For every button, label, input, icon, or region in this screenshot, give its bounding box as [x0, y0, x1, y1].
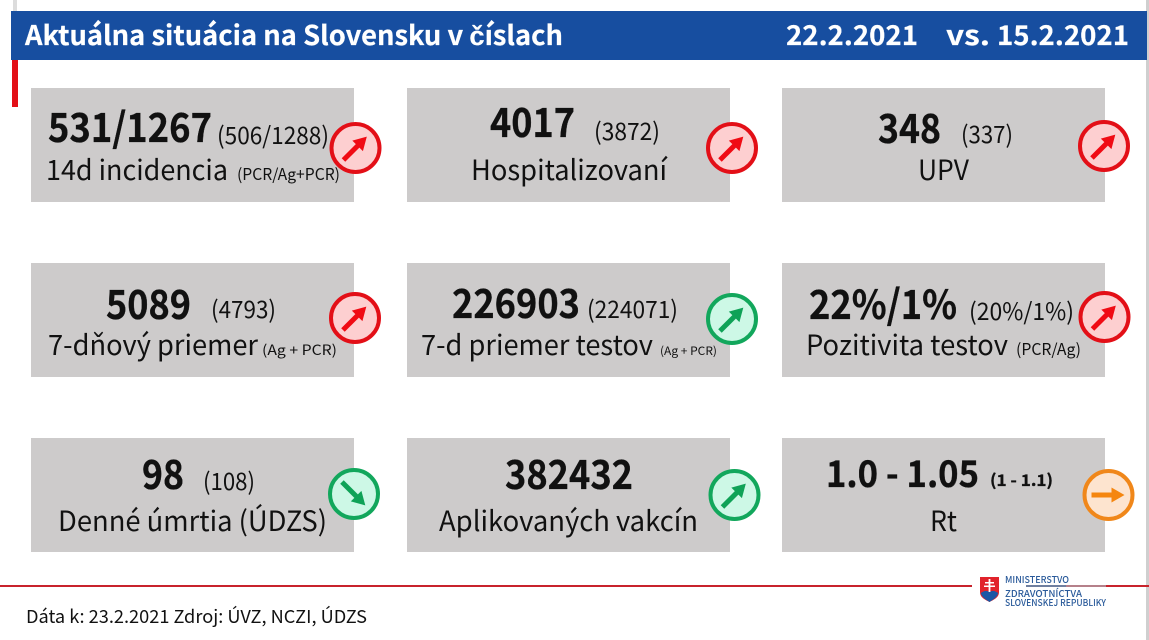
panel: Denné úmrtia [31, 438, 378, 552]
icon: red up arrow [331, 294, 379, 342]
label: 14d incidencia [46, 149, 228, 189]
vs label: vs. [946, 14, 990, 53]
value: 1.0 - 1.05 [826, 444, 979, 498]
icon: green up arrow [708, 295, 756, 343]
label: Hospitalizovaní [471, 149, 668, 189]
panel: 14d incidencia [31, 88, 380, 202]
previous value: (224071) [587, 290, 678, 325]
logo text line 2: ZDRAVOTNÍCTVA [1005, 586, 1082, 600]
value: 531/1267 [48, 96, 212, 154]
label note: (Ag + PCR) [660, 343, 717, 359]
value: 22%/1% [809, 273, 957, 331]
previous value: (1 - 1.1) [990, 467, 1053, 491]
panel: Rt [782, 438, 1132, 552]
current date: 22.2.2021 [786, 14, 918, 53]
label note: (PCR/Ag) [1016, 336, 1081, 360]
previous value: (3872) [594, 112, 660, 147]
value: 4017 [490, 91, 575, 149]
panel: Aplikovaných vakcín [407, 438, 758, 552]
value: 226903 [452, 272, 580, 330]
label note: (Ag + PCR) [262, 340, 337, 360]
label note: (PCR/Ag+PCR) [237, 161, 340, 185]
previous value: (108) [203, 462, 255, 497]
panel: 7-d priemer testov [407, 263, 756, 377]
logo text line 1: MINISTERSTVO [1005, 572, 1069, 586]
label: UPV [918, 149, 970, 189]
icon: red up arrow [1080, 293, 1128, 341]
value: 98 [142, 443, 184, 501]
label: Denné úmrtia (ÚDZS) [58, 500, 327, 540]
icon: green up arrow [710, 471, 758, 519]
panel: Pozitivita testov [782, 263, 1128, 377]
title: Aktuálna situácia na Slovensku v číslach [24, 14, 563, 53]
icon: red up arrow [332, 124, 380, 172]
value: 5089 [106, 273, 191, 331]
icon: red up arrow [1080, 122, 1128, 170]
value: 382432 [505, 443, 633, 501]
label: Aplikovaných vakcín [439, 500, 698, 540]
previous value: (506/1288) [217, 116, 329, 151]
panel: 7-dňový priemer [31, 263, 379, 377]
previous value: (337) [961, 115, 1013, 150]
previous value: (20%/1%) [969, 292, 1074, 327]
panel: UPV [782, 88, 1128, 202]
source note: Dáta k: 23.2.2021 Zdroj: ÚVZ, NCZI, ÚDZS [26, 603, 367, 629]
icon: orange right arrow [1084, 471, 1132, 519]
value: 348 [878, 97, 941, 155]
icon: green down arrow [330, 470, 378, 518]
ministry logo [980, 572, 1107, 609]
label: Rt [930, 500, 957, 540]
label: 7-d priemer testov [421, 324, 653, 364]
header bar [11, 11, 1147, 60]
label: Pozitivita testov [806, 324, 1008, 364]
label: 7-dňový priemer [48, 324, 258, 364]
comparison date: 15.2.2021 [997, 14, 1129, 53]
previous value: (4793) [211, 290, 276, 325]
logo text line 3: SLOVENSKEJ REPUBLIKY [1005, 595, 1107, 609]
icon: red up arrow [708, 124, 756, 172]
panel: Hospitalizovaní [407, 88, 756, 202]
icon: coat of arms [980, 577, 999, 602]
